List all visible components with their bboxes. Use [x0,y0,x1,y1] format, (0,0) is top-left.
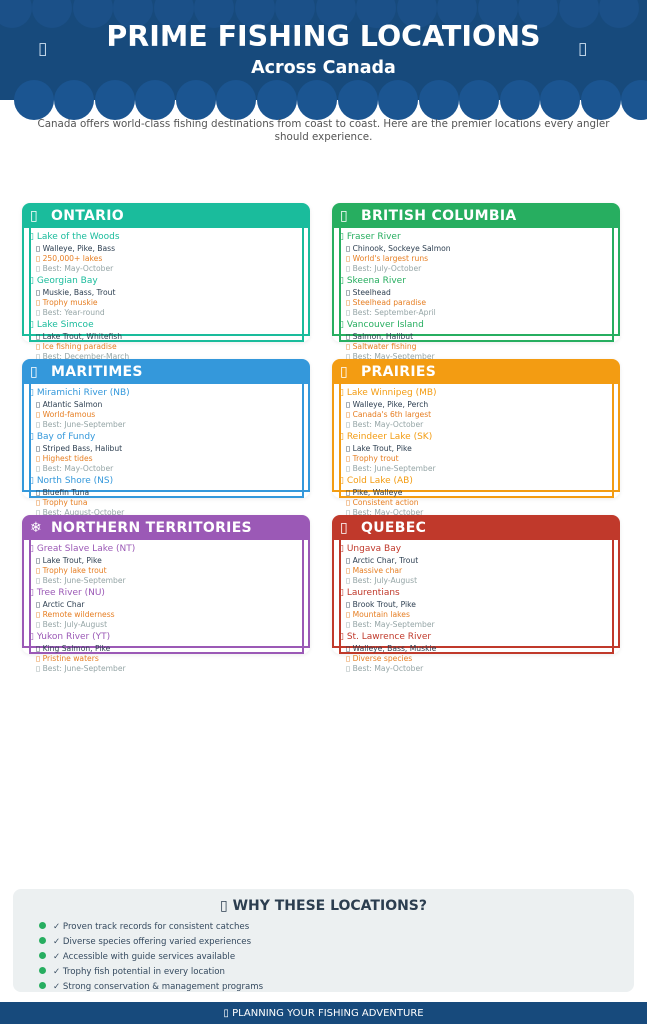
list: reasons: ✓ Proven track records for consistent catches [53,922,249,932]
list: prairies locations: ▯ Pike, Walleye [346,488,402,497]
list: maritimes locations: ▯ Best: May-October [36,464,113,473]
list: prairies locations: ▯ Lake Winnipeg (MB) [339,388,437,398]
footer bar [0,1002,647,1024]
list: reasons: ✓ Diverse species offering varied experiences [53,937,251,947]
list: quebec locations: ▯ Arctic Char, Trout [346,556,418,565]
list: quebec locations: ▯ Ungava Bay [339,544,401,554]
list: maritimes locations: ▯ Highest tides [36,454,93,463]
list: ontario locations [29,232,129,361]
list: quebec locations: ▯ Laurentians [339,588,400,598]
heading: maritimes [22,359,310,383]
list: northern locations: ▯ Yukon River (YT) [29,632,110,642]
heading: british columbia: BRITISH COLUMBIA [361,208,517,224]
heading: maritimes: MARITIMES [51,364,143,380]
panel: ontario [22,203,310,342]
header banner [0,0,647,120]
list: quebec locations: ▯ Best: July-August [346,576,417,585]
list: northern locations [29,544,135,673]
list: maritimes locations [29,388,130,517]
heading: ontario: ONTARIO [51,208,124,224]
list: maritimes locations: ▯ Miramichi River (NB) [29,388,130,398]
list: northern locations: ▯ King Salmon, Pike [36,644,110,653]
list: ontario locations: ▯ 250,000+ lakes [36,254,102,263]
list: bc locations: ▯ Salmon, Halibut [346,332,413,341]
list: maritimes locations: ▯ Striped Bass, Halibut [36,444,122,453]
list: prairies locations: ▯ Best: June-September [346,464,436,473]
list: ontario locations: ▯ Ice fishing paradise [36,342,117,351]
heading: quebec [332,515,620,539]
list: bc locations: ▯ Best: May-September [346,352,435,361]
list: reasons [39,922,263,992]
heading: why: ▯ WHY THESE LOCATIONS? [220,898,427,914]
panel: quebec [332,515,620,654]
list: quebec locations: ▯ Mountain lakes [346,610,410,619]
list: bc locations: ▯ Vancouver Island [339,320,424,330]
list: quebec locations: ▯ Massive char [346,566,402,575]
list: bc locations: ▯ Skeena River [339,276,406,286]
list: northern locations: ▯ Trophy lake trout [36,566,107,575]
list: prairies locations: ▯ Reindeer Lake (SK) [339,432,432,442]
list: ontario locations: ▯ Trophy muskie [36,298,98,307]
list: northern locations: ▯ Tree River (NU) [29,588,105,598]
list: bc locations: ▯ Best: September-April [346,308,436,317]
list: quebec locations [339,544,436,673]
list: ontario locations: ▯ Georgian Bay [29,276,98,286]
list: prairies locations [339,388,437,517]
list: quebec locations: ▯ St. Lawrence River [339,632,431,642]
title: PRIME FISHING LOCATIONS [106,20,541,53]
heading: northern territories [22,515,310,539]
heading: prairies [332,359,620,383]
list: maritimes locations: ▯ Atlantic Salmon [36,400,102,409]
heading: northern territories: ❄ [30,520,42,536]
list: prairies locations: ▯ Trophy trout [346,454,399,463]
panel: northern territories [22,515,310,654]
list: northern locations: ▯ Best: June-September [36,664,126,673]
list: reasons: ✓ Accessible with guide services available [53,952,235,962]
list: bc locations: ▯ Steelhead paradise [346,298,426,307]
list: maritimes locations: ▯ Bay of Fundy [29,432,95,442]
list: ontario locations: ▯ Best: May-October [36,264,113,273]
list: bc locations [339,232,451,361]
list: reasons: ✓ Strong conservation & management programs [53,982,263,992]
heading: maritimes: ▯ [30,364,38,380]
heading: prairies: PRAIRIES [361,364,436,380]
list: ontario locations: ▯ Best: Year-round [36,308,105,317]
heading: british columbia: ▯ [340,208,348,224]
list: maritimes locations: ▯ Trophy tuna [36,498,88,507]
list: bc locations: ▯ Saltwater fishing [346,342,416,351]
panel: prairies [332,359,620,498]
list: prairies locations: ▯ Best: May-October [346,508,423,517]
list: northern locations: ▯ Arctic Char [36,600,84,609]
list: ontario locations: ▯ Lake of the Woods [29,232,120,242]
list: bc locations: ▯ World's largest runs [346,254,428,263]
list: ontario locations: ▯ Muskie, Bass, Trout [36,288,115,297]
list: maritimes locations: ▯ World-famous [36,410,95,419]
list: ontario locations: ▯ Lake Simcoe [29,320,94,330]
footer bar: ▯ PLANNING YOUR FISHING ADVENTURE [223,1008,424,1019]
list: maritimes locations: ▯ Best: August-October [36,508,124,517]
panel: british columbia [332,203,620,342]
list: prairies locations: ▯ Lake Trout, Pike [346,444,412,453]
list: quebec locations: ▯ Brook Trout, Pike [346,600,416,609]
heading: british columbia [332,203,620,227]
heading: quebec: QUEBEC [361,520,426,536]
list: northern locations: ▯ Best: June-September [36,576,126,585]
list: maritimes locations: ▯ North Shore (NS) [29,476,113,486]
list: northern locations: ▯ Best: July-August [36,620,107,629]
list: maritimes locations: ▯ Best: June-September [36,420,126,429]
heading: ontario [22,203,310,227]
panel: maritimes [22,359,310,498]
heading: prairies: ▯ [340,364,348,380]
icon: right fish: ▯ [578,39,587,59]
heading: quebec: ▯ [340,520,348,536]
list: quebec locations: ▯ Best: May-October [346,664,423,673]
panel: why these locations [13,889,634,992]
list: quebec locations: ▯ Walleye, Bass, Muskie [346,644,436,653]
heading: northern territories: NORTHERN TERRITORIES [51,520,252,536]
list: northern locations: ▯ Lake Trout, Pike [36,556,102,565]
list: bc locations: ▯ Fraser River [339,232,401,242]
list: prairies locations: ▯ Cold Lake (AB) [339,476,413,486]
list: prairies locations: ▯ Consistent action [346,498,419,507]
list: ontario locations: ▯ Walleye, Pike, Bass [36,244,115,253]
intro text: Canada offers world-class fishing destinations from coast to coast. Here are the premier locations every angler should experience. [38,118,609,143]
list: ontario locations: ▯ Best: December-March [36,352,129,361]
list: bc locations: ▯ Best: July-October [346,264,421,273]
list: northern locations: ▯ Great Slave Lake (NT) [29,544,135,554]
list: bc locations: ▯ Chinook, Sockeye Salmon [346,244,451,253]
list: ontario locations: ▯ Lake Trout, Whitefish [36,332,122,341]
heading: ontario: ▯ [30,208,38,224]
icon: left fish: ▯ [38,39,47,59]
list: quebec locations: ▯ Best: May-September [346,620,435,629]
list: prairies locations: ▯ Best: May-October [346,420,423,429]
list: northern locations: ▯ Pristine waters [36,654,99,663]
subtitle: Across Canada [251,58,396,78]
list: reasons: ✓ Trophy fish potential in every location [53,967,225,977]
list: quebec locations: ▯ Diverse species [346,654,412,663]
list: prairies locations: ▯ Walleye, Pike, Perch [346,400,428,409]
list: prairies locations: ▯ Canada's 6th largest [346,410,431,419]
list: bc locations: ▯ Steelhead [346,288,391,297]
list: northern locations: ▯ Remote wilderness [36,610,115,619]
list: maritimes locations: ▯ Bluefin Tuna [36,488,89,497]
